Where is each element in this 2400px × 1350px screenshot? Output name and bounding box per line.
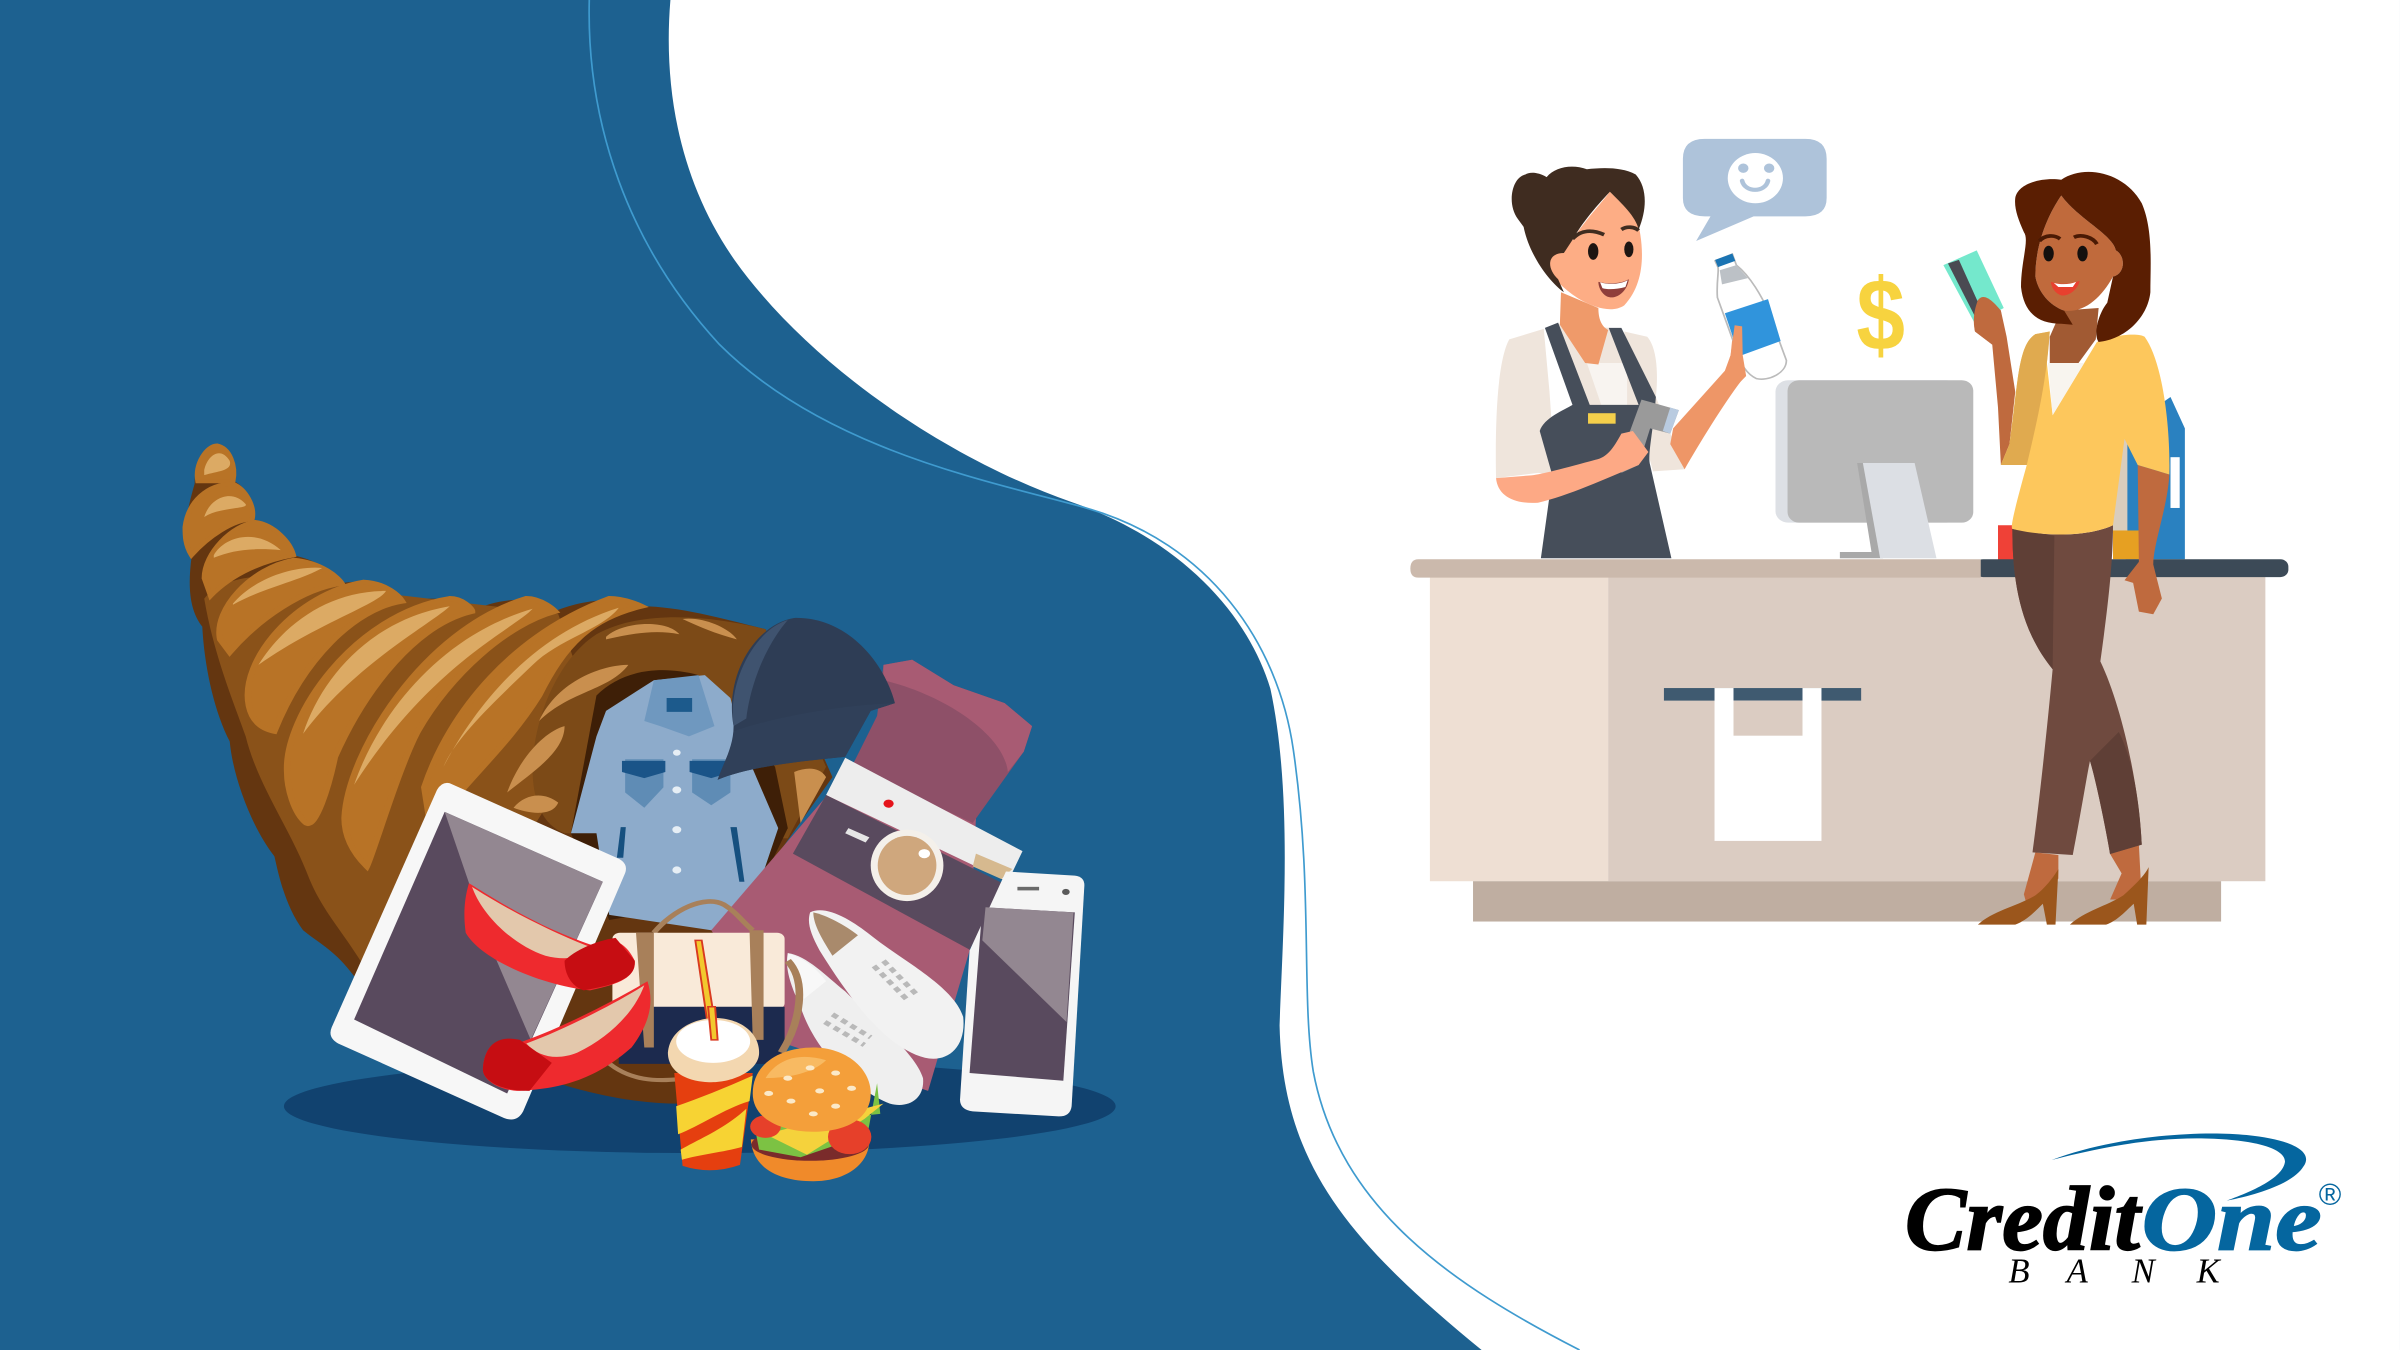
water bottle bbox=[1715, 254, 1786, 392]
baseball cap bbox=[718, 618, 895, 780]
mauve rolled mat bbox=[711, 660, 1032, 1091]
logo word One: One bbox=[2142, 1168, 2322, 1269]
customer bbox=[1974, 172, 2169, 925]
smartphone bbox=[960, 872, 1084, 1116]
logo word BANK: A bbox=[2065, 1253, 2089, 1291]
credit card in hand bbox=[1943, 250, 2004, 345]
cornucopia group with goods bbox=[185, 446, 1116, 1181]
tablet bbox=[330, 783, 626, 1119]
cornucopia horn bbox=[185, 446, 832, 1104]
red high heels bbox=[464, 883, 650, 1091]
logo word Credit: Credit bbox=[1905, 1168, 2143, 1269]
camera bbox=[793, 758, 1023, 950]
logo word BANK: N bbox=[2131, 1253, 2157, 1291]
satchel bag bbox=[603, 901, 799, 1080]
logo swoosh bbox=[2052, 1133, 2306, 1201]
ground shadow bbox=[284, 1059, 1116, 1153]
Credit One Bank logo bbox=[1905, 1133, 2342, 1291]
computer monitor bbox=[1775, 380, 1973, 558]
registered mark: ® bbox=[2319, 1178, 2342, 1212]
dollar sign: $ bbox=[1856, 258, 1905, 372]
logo word BANK: K bbox=[2196, 1253, 2222, 1291]
checkout scene bbox=[1410, 139, 2288, 925]
denim jacket bbox=[571, 675, 778, 930]
cashier bbox=[1496, 167, 1745, 558]
speech bubble with smiley bbox=[1683, 139, 1827, 241]
counter bbox=[1410, 559, 2288, 922]
grocery items behind counter bbox=[1998, 397, 2185, 560]
logo word BANK: B bbox=[2008, 1253, 2030, 1291]
white wave panel bbox=[669, 0, 2400, 1350]
hamburger bbox=[750, 1048, 883, 1181]
white sneakers bbox=[787, 910, 964, 1105]
soda cup bbox=[668, 940, 759, 1170]
